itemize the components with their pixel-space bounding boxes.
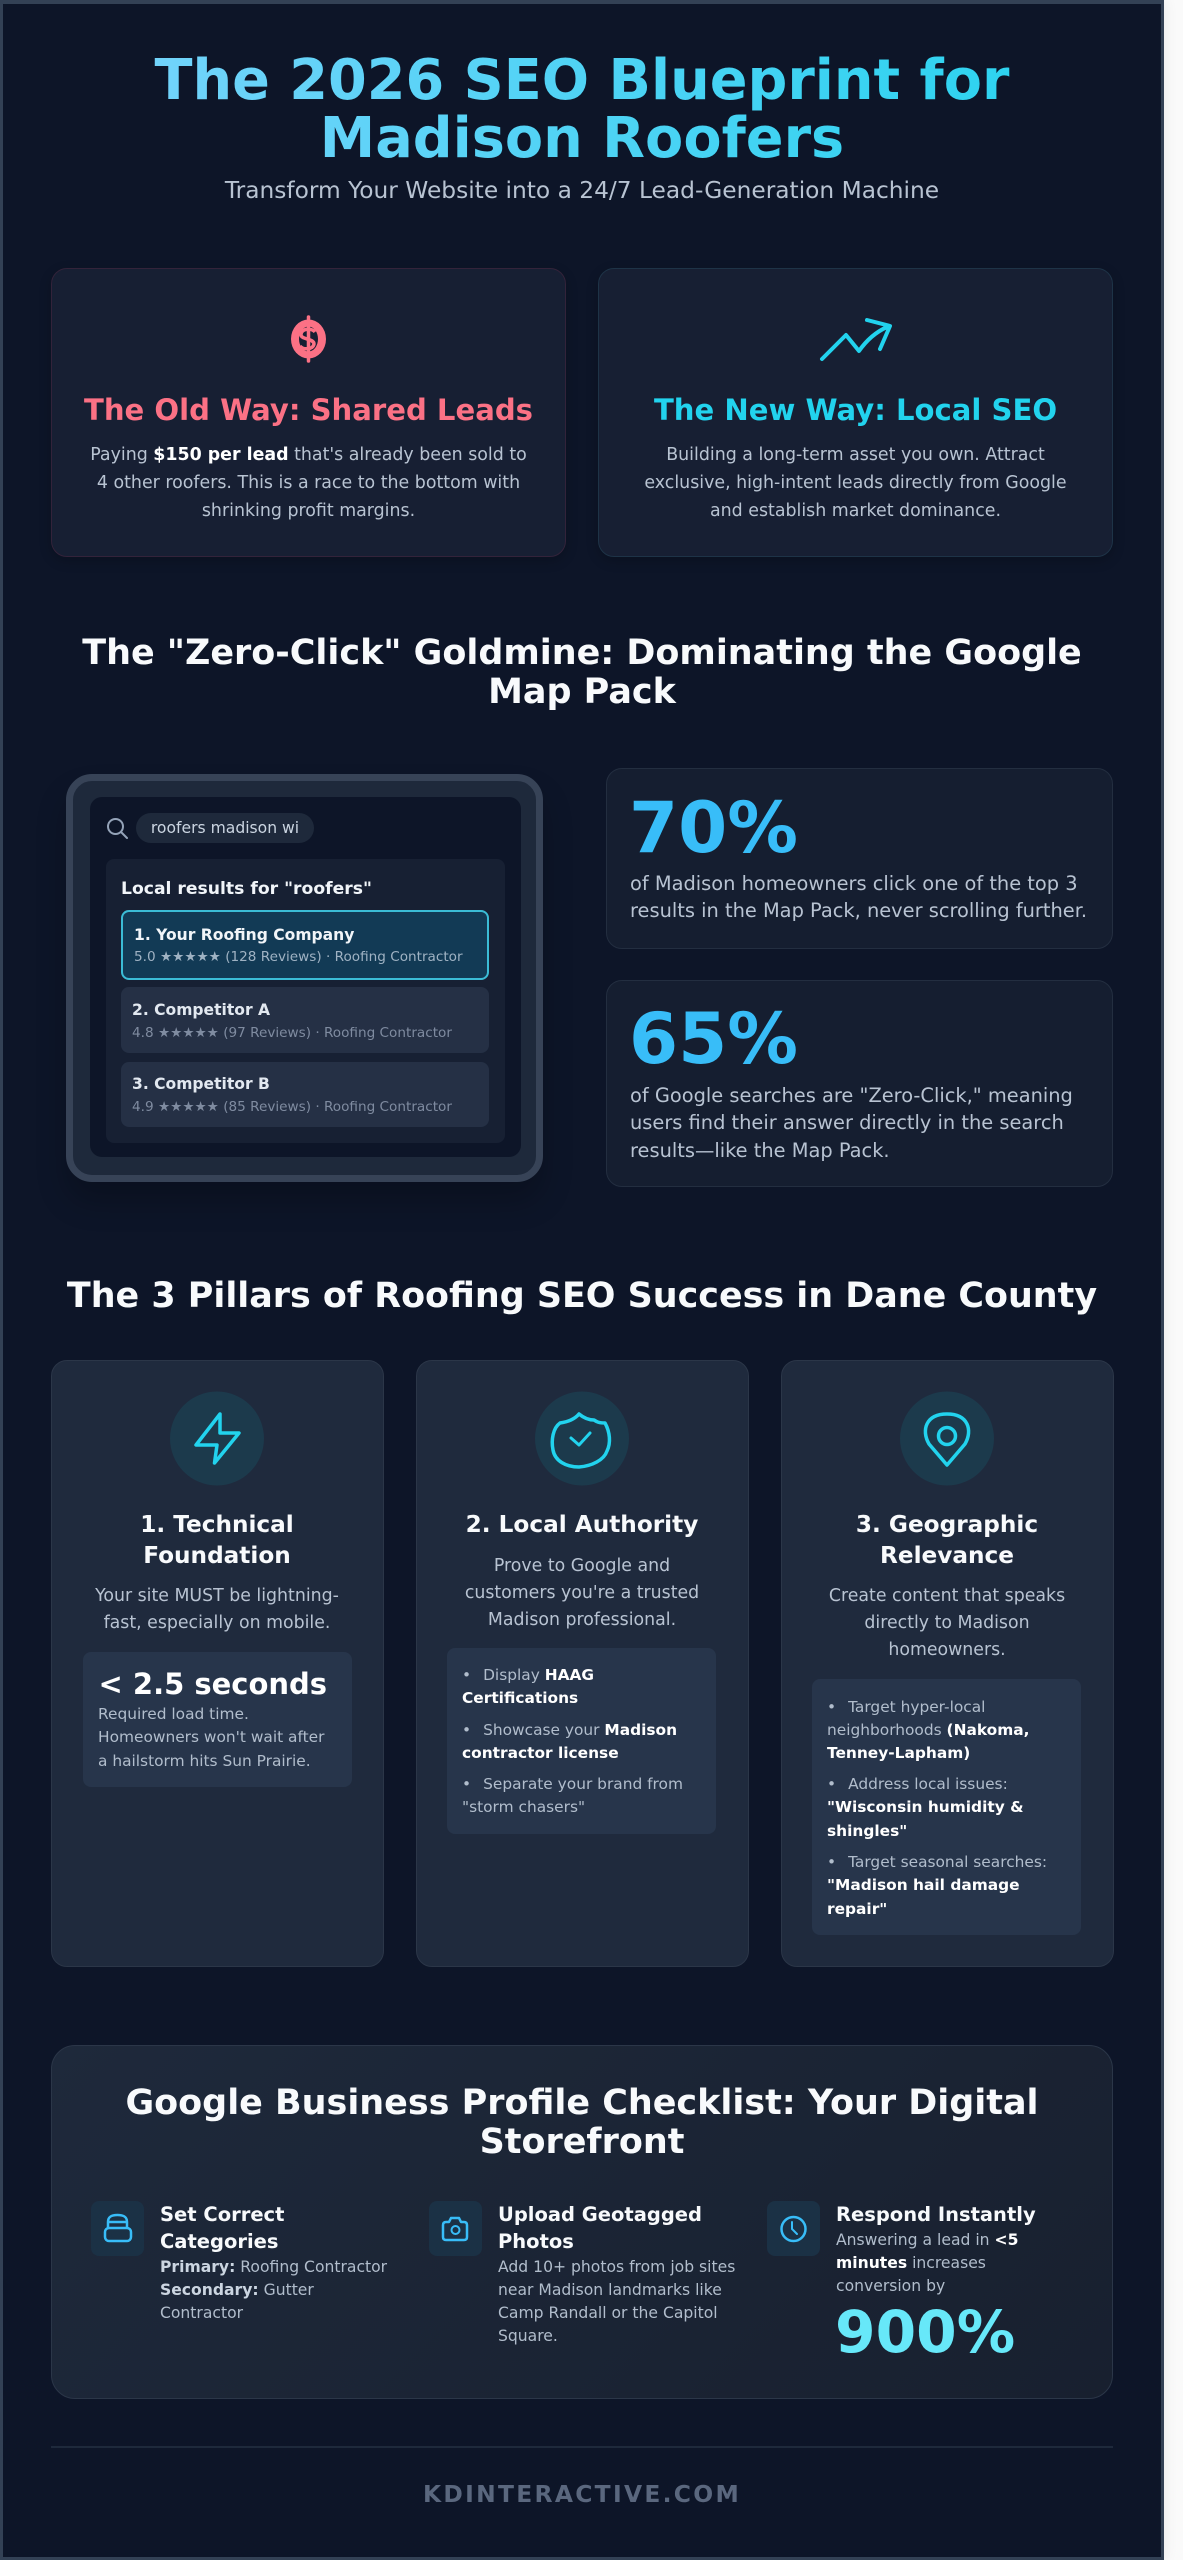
title: Madison Roofers — [320, 106, 844, 170]
result 3 details: 4.9 ★★★★★ (85 Reviews) · Roofing Contractor — [132, 1098, 452, 1114]
stat text: 65%: of Google searches are "Zero-Click," meaning — [630, 1084, 1073, 1106]
result 2 — [121, 987, 489, 1053]
footer divider — [51, 2446, 1113, 2448]
checklist item 2 text: Square. — [498, 2327, 558, 2345]
icon: camera — [429, 2201, 482, 2256]
list item: • Display HAAG — [462, 1666, 594, 1684]
list item: shingles" — [827, 1822, 907, 1840]
title: The 2026 SEO Blueprint for — [154, 48, 1010, 112]
checklist item 3 title: Respond Instantly — [836, 2202, 1036, 2226]
panel: old way — [50, 268, 566, 557]
heading: zero-click: Map Pack — [488, 672, 676, 712]
panel: new way — [598, 268, 1113, 557]
stat: 900%: 900% — [835, 2298, 1015, 2366]
checklist item 1 text: Primary: Roofing Contractor — [160, 2258, 387, 2276]
checklist item 2 title — [498, 2202, 702, 2252]
list item — [462, 1775, 683, 1816]
phone screen — [90, 797, 521, 1157]
list item: • Showcase your Madison — [462, 1721, 677, 1739]
list item — [827, 1775, 1024, 1840]
heading: zero-click: The "Zero-Click" Goldmine: Dominating the Google — [82, 633, 1082, 673]
checklist item 1 title: Set Correct — [160, 2202, 284, 2226]
heading: new way: The New Way: Local SEO — [654, 393, 1057, 427]
result 3 — [121, 1062, 489, 1127]
list item: Certifications — [462, 1689, 578, 1707]
list item: "storm chasers" — [462, 1798, 585, 1816]
icon: search — [107, 818, 128, 839]
pillar 3 title — [856, 1510, 1038, 1568]
icon: trending arrow — [820, 318, 892, 362]
text: old way: Paying $150 per lead that's already been sold to — [90, 444, 527, 464]
pillar 1 callout — [83, 1652, 352, 1787]
subtitle: Transform Your Website into a 24/7 Lead-Generation Machine — [225, 176, 939, 204]
checklist item 1 title — [160, 2202, 284, 2252]
list item: • Separate your brand from — [462, 1775, 683, 1793]
pillar 2 description: Prove to Google and — [494, 1556, 670, 1576]
list item: • Target hyper-local — [827, 1698, 985, 1716]
checklist item 2 text: Add 10+ photos from job sites — [498, 2258, 735, 2276]
results heading: Local results for "roofers" — [121, 879, 372, 899]
title — [0, 52, 1164, 168]
checklist item 1 text — [160, 2258, 388, 2322]
list item: • Address local issues: — [827, 1775, 1008, 1793]
list item: repair" — [827, 1900, 887, 1918]
callout text: Homeowners won't wait after — [98, 1728, 324, 1746]
checklist item 3 text: Answering a lead in <5 — [836, 2230, 1018, 2248]
panel: pillar 2 — [416, 1360, 748, 1967]
pillar 1 title: 1. Technical — [140, 1510, 294, 1538]
stat text: 70%: results in the Map Pack, never scrolling further. — [630, 899, 1087, 922]
stat text: 65%: users find their answer directly in the search — [630, 1111, 1064, 1134]
checklist heading: Google Business Profile Checklist: Your Digital — [126, 2083, 1038, 2123]
pillar 1 description — [95, 1586, 339, 1633]
stat number: 65%: 65% — [629, 997, 798, 1080]
callout text: Required load time. — [98, 1705, 249, 1723]
phone mockup — [66, 774, 543, 1182]
icon: map pin — [900, 1392, 994, 1486]
results panel — [106, 859, 505, 1143]
stat text: 70%: of Madison homeowners click one of the top 3 — [630, 872, 1078, 894]
checklist item 2 text: near Madison landmarks like — [498, 2281, 722, 2299]
callout text — [98, 1705, 324, 1770]
list item: • Target seasonal searches: — [827, 1853, 1047, 1871]
list item: neighborhoods (Nakoma, — [827, 1721, 1030, 1739]
callout text: a hailstorm hits Sun Prairie. — [98, 1752, 311, 1770]
pillar 1 description: fast, especially on mobile. — [104, 1613, 330, 1633]
result 2 name: 2. Competitor A — [132, 1001, 270, 1019]
checklist heading — [126, 2083, 1038, 2162]
stat text: 65% — [630, 1084, 1073, 1162]
checklist heading: Storefront — [480, 2122, 684, 2162]
search pill — [136, 813, 314, 843]
list item: "Wisconsin humidity & — [827, 1798, 1024, 1816]
list item: Tenney-Lapham) — [827, 1744, 970, 1762]
stat card: 70% — [606, 768, 1113, 949]
list item: "Madison hail damage — [827, 1876, 1020, 1894]
icon: lightning bolt — [170, 1392, 264, 1486]
panel: pillar 3 — [780, 1360, 1114, 1967]
pillar 1 description: Your site MUST be lightning- — [95, 1586, 339, 1606]
text: new way: Building a long-term asset you own. Attract — [666, 444, 1045, 464]
text: old way — [90, 444, 527, 521]
checklist item 1 text: Contractor — [160, 2304, 243, 2322]
list item — [827, 1698, 1030, 1762]
footer text: KDINTERACTIVE.COM — [423, 2480, 741, 2508]
checklist item 3 text: minutes increases — [836, 2254, 986, 2272]
pillar 3 title: 3. Geographic — [856, 1510, 1038, 1538]
icon: shield check — [535, 1392, 629, 1486]
pillar 1 title — [140, 1510, 294, 1568]
checklist item 2 title: Upload Geotagged — [498, 2202, 702, 2226]
pillar 2 description — [465, 1556, 699, 1630]
pillar 3 title: Relevance — [880, 1542, 1014, 1568]
result 1 name: 1. Your Roofing Company — [134, 926, 354, 944]
checklist item 2 text: Camp Randall or the Capitol — [498, 2304, 718, 2322]
stat number: 70%: 70% — [629, 786, 798, 868]
pillar 2 list box — [447, 1648, 716, 1834]
result 3 name: 3. Competitor B — [132, 1075, 270, 1093]
pillar 1 title: Foundation — [143, 1542, 291, 1568]
search pill: roofers madison wi — [151, 819, 299, 837]
checklist item 3 text: conversion by — [836, 2277, 945, 2295]
list item — [462, 1666, 594, 1707]
heading: old way: The Old Way: Shared Leads — [84, 393, 533, 427]
icon: clock — [767, 2201, 820, 2256]
panel: checklist — [50, 2045, 1113, 2399]
list item — [462, 1721, 677, 1762]
checklist item 2 text — [498, 2258, 735, 2345]
checklist item 1 text: Secondary: Gutter — [160, 2281, 314, 2299]
checklist item 2 title: Photos — [498, 2230, 574, 2252]
stat text: 65%: results—like the Map Pack. — [630, 1138, 890, 1162]
result 2 details: 4.8 ★★★★★ (97 Reviews) · Roofing Contractor — [132, 1025, 452, 1041]
pillar 2 description: Madison professional. — [488, 1610, 676, 1630]
checklist item 1 title: Categories — [160, 2230, 279, 2252]
icon: categories — [91, 2201, 144, 2256]
pillar 3 description: directly to Madison — [864, 1613, 1030, 1633]
stat text: 70% — [630, 872, 1087, 922]
result 1 — [121, 910, 489, 980]
text: new way: exclusive, high-intent leads directly from Google — [644, 473, 1067, 493]
text: new way: and establish market dominance. — [710, 501, 1001, 521]
callout number: < 2.5 seconds — [98, 1667, 327, 1701]
checklist item 3 text — [836, 2230, 1018, 2295]
text: old way: 4 other roofers. This is a race to the bottom with — [97, 473, 520, 493]
pillar 2 title: 2. Local Authority — [466, 1510, 698, 1538]
panel: pillar 1 — [50, 1360, 384, 1967]
pillar 3 description — [829, 1586, 1065, 1660]
result 1 details: 5.0 ★★★★★ (128 Reviews) · Roofing Contractor — [134, 949, 463, 965]
text: new way — [644, 444, 1067, 521]
heading: zero-click — [82, 633, 1082, 712]
pillar 3 list box — [812, 1679, 1081, 1935]
list item: contractor license — [462, 1744, 619, 1762]
pillar 3 description: Create content that speaks — [829, 1586, 1065, 1606]
heading: pillars: The 3 Pillars of Roofing SEO Success in Dane County — [67, 1276, 1097, 1316]
text: old way: shrinking profit margins. — [202, 501, 415, 521]
icon: dollar — [291, 315, 326, 363]
list item — [827, 1853, 1047, 1918]
stat card: 65% — [606, 980, 1113, 1187]
pillar 2 description: customers you're a trusted — [465, 1583, 699, 1603]
pillar 3 description: homeowners. — [888, 1640, 1006, 1660]
